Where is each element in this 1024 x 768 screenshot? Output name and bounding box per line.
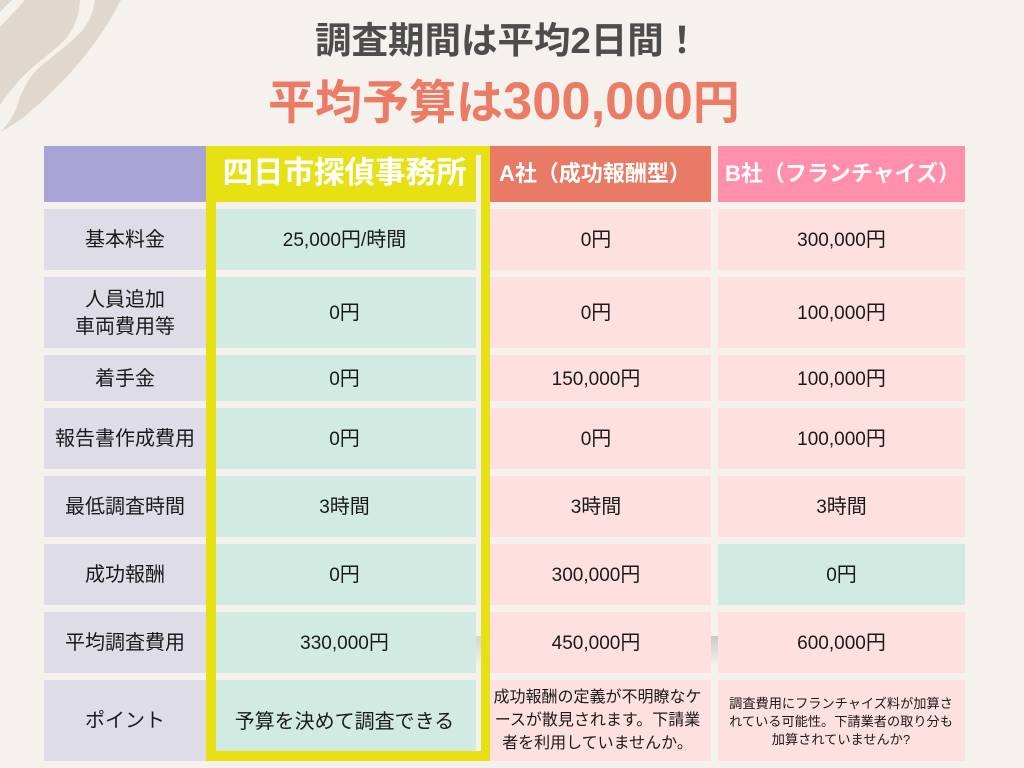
cell: 0円: [329, 428, 360, 450]
cell: [216, 277, 476, 348]
header: 四日市探偵事務所: 四日市探偵事務所: [222, 156, 466, 190]
row label: 人員追加 車両費用等: [44, 277, 206, 348]
cell: 150,000円: [552, 368, 640, 390]
cell: 300,000円: [797, 229, 886, 251]
cell: 3時間: [319, 496, 370, 518]
row label: 平均調査費用: 平均調査費用: [65, 632, 185, 654]
cell: [216, 544, 476, 605]
cell: 0円: [329, 302, 360, 324]
row label: ポイント: [44, 680, 206, 761]
cell: 100,000円: [797, 368, 886, 390]
cell: [718, 355, 965, 401]
cell: 0円: [329, 368, 360, 390]
cell: [216, 612, 476, 673]
header: B社: [718, 146, 965, 202]
header: B社: B社（フランチャイズ）: [725, 160, 960, 186]
cell: point B: 調査費用にフランチャイズ料が加算さ: [729, 696, 953, 710]
cell: 0円: [826, 564, 857, 586]
cell: 100,000円: [797, 302, 886, 324]
row label: 最低調査時間: [44, 476, 206, 537]
cell: 450,000円: [552, 632, 640, 654]
cell: 0円: [329, 564, 360, 586]
row label: 成功報酬: [44, 544, 206, 605]
cell: [490, 277, 711, 348]
cell: point B: 加算されていませんか?: [772, 732, 910, 746]
cell: [718, 277, 965, 348]
row label: 最低調査時間: 最低調査時間: [65, 496, 185, 518]
cell: 100,000円: [797, 428, 886, 450]
heading: average budget: 平均予算は300,000円: [268, 72, 740, 131]
cell: [490, 544, 711, 605]
cell: point A: 成功報酬の定義が不明瞭なケ: [493, 689, 702, 706]
cell: [216, 209, 476, 270]
row label: 着手金: 着手金: [95, 368, 155, 390]
cell: [718, 544, 965, 605]
grey fade mark: [711, 636, 718, 666]
cell: [718, 612, 965, 673]
cell: point B: れている可能性。下請業者の取り分も: [729, 714, 953, 728]
cell: point: [216, 680, 476, 751]
cell: [216, 408, 476, 469]
cell: [490, 209, 711, 270]
cell: [718, 209, 965, 270]
cell: [490, 355, 711, 401]
cell: 3時間: [816, 496, 867, 518]
cell: 0円: [581, 229, 611, 251]
row label: 基本料金: 基本料金: [85, 229, 165, 251]
highlight frame: 四日市探偵事務所: [206, 146, 490, 761]
cell: [490, 408, 711, 469]
cell: 0円: [581, 428, 611, 450]
cell: 0円: [581, 302, 611, 324]
cell: 600,000円: [797, 632, 886, 654]
row label: 人員追加 車両費用等: 車両費用等: [75, 316, 175, 338]
cell: 300,000円: [552, 564, 640, 586]
row label: ポイント: ポイント: [85, 710, 165, 732]
cell: 3時間: [571, 496, 621, 518]
cell: [490, 612, 711, 673]
cell: 330,000円: [300, 632, 389, 654]
cell: [216, 476, 476, 537]
row label: 着手金: [44, 355, 206, 401]
header: A社: [490, 146, 711, 202]
cell: [718, 408, 965, 469]
frame inner gap: [216, 202, 481, 751]
row label: 基本料金: [44, 209, 206, 270]
header: blank label column: [44, 146, 206, 202]
cell: point A: [490, 680, 711, 761]
frame right gap: [476, 155, 481, 202]
decorative leaf shape: [0, 0, 121, 132]
cell: point B: [718, 680, 965, 761]
cell: [490, 476, 711, 537]
heading: survey period: 調査期間は平均2日間！: [315, 20, 700, 61]
header: A社: A社（成功報酬型）: [499, 160, 691, 186]
cell: point A: 者を利用していませんか。: [502, 735, 693, 752]
cell: point A: ースが散見されます。下請業: [495, 712, 700, 729]
row label: 報告書作成費用: 報告書作成費用: [55, 428, 195, 450]
cell: 25,000円/時間: [283, 229, 406, 251]
row label: 人員追加 車両費用等: 人員追加: [85, 288, 165, 310]
row label: 報告書作成費用: [44, 408, 206, 469]
row label: 平均調査費用: [44, 612, 206, 673]
grey fade mark left: [476, 636, 481, 666]
row label: 成功報酬: 成功報酬: [85, 564, 165, 586]
cell: [718, 476, 965, 537]
cell: point: 予算を決めて調査できる: [235, 710, 454, 732]
cell: [216, 355, 476, 401]
